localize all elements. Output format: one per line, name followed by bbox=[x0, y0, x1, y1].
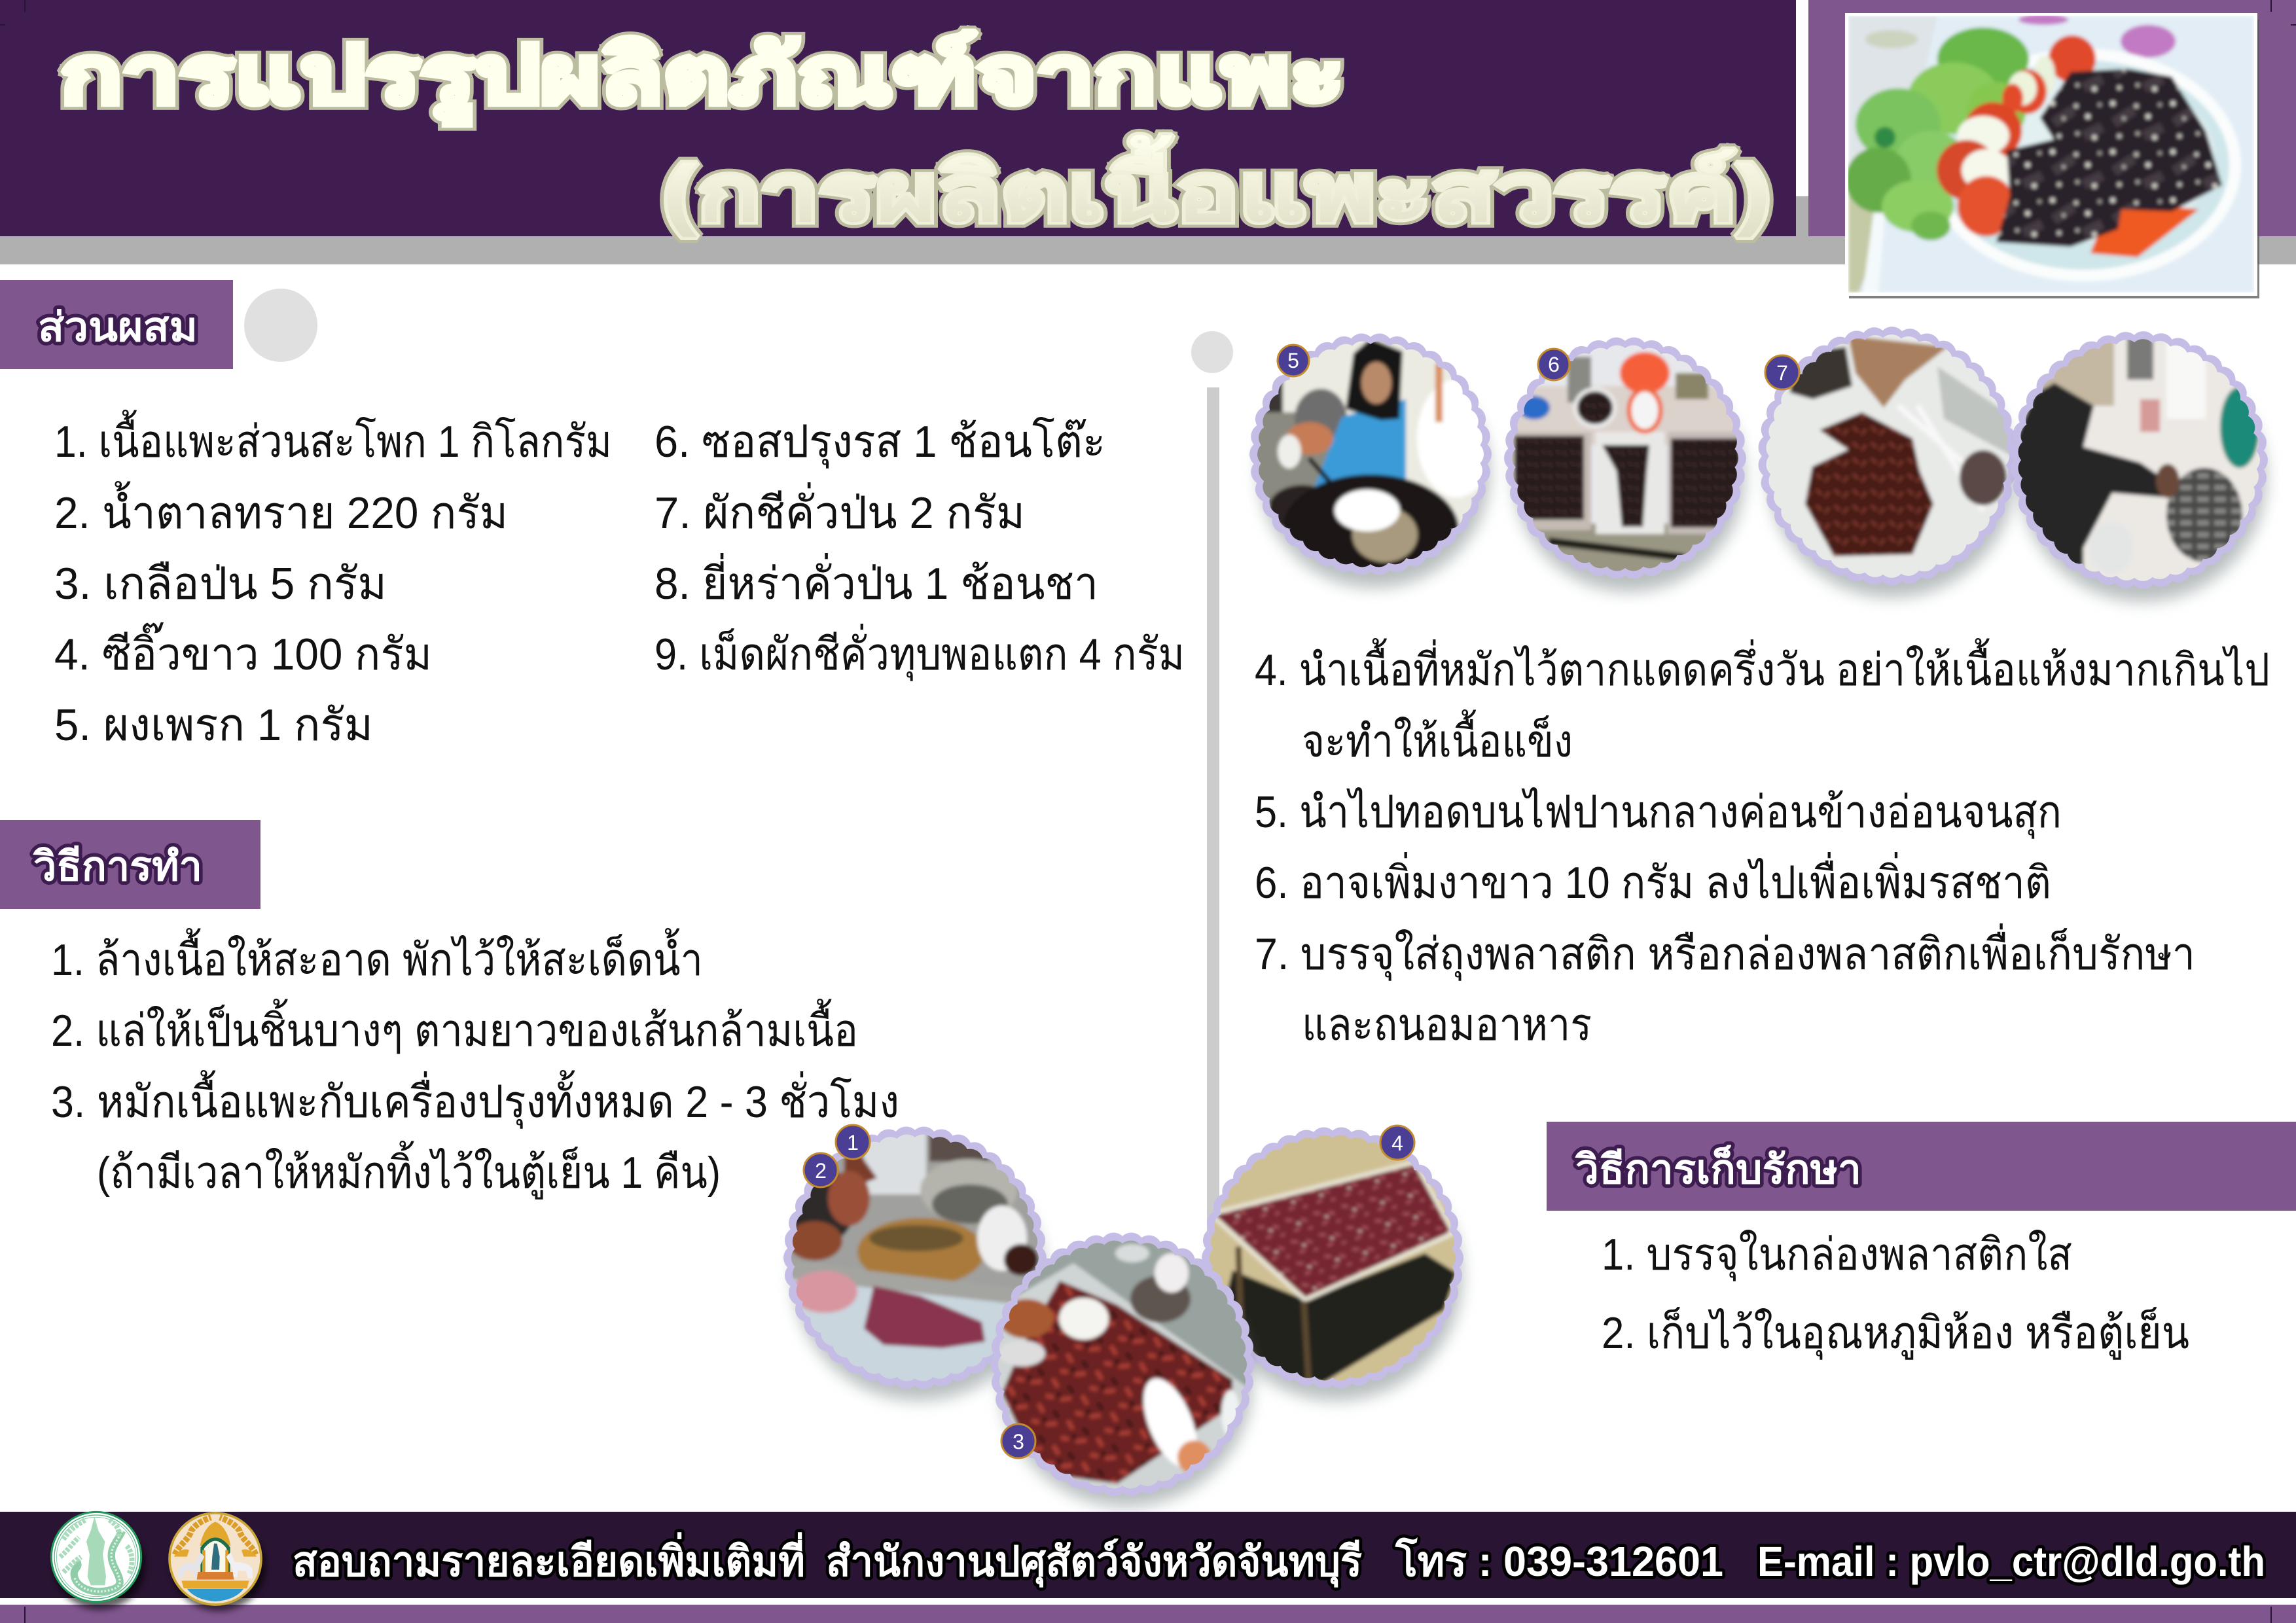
ingredients list: 4. ซีอิ๊วขาว 100 กรัม bbox=[54, 622, 432, 679]
footer contact text: E-mail : pvlo_ctr@dld.go.th bbox=[1757, 1538, 2265, 1585]
method steps 1-3: 3. หมักเนื้อแพะกับเครื่องปรุงทั้งหมด 2 - 3 ชั่วโมง bbox=[51, 1070, 899, 1129]
method steps 4-7 bbox=[1255, 638, 2270, 1050]
method steps 4-7: 7. บรรจุใส่ถุงพลาสติก หรือกล่องพลาสติกเพื่อเก็บรักษา bbox=[1255, 923, 2195, 981]
photo 3: seasoning meat bbox=[988, 1230, 1263, 1507]
ingredients list: 2. น้ำตาลทราย 220 กรัม bbox=[54, 481, 508, 538]
footer band bbox=[0, 1512, 2296, 1623]
badge 5: 5 bbox=[1287, 349, 1299, 372]
logo: Chanthaburi province seal bbox=[170, 1513, 266, 1611]
ingredients list: 3. เกลือป่น 5 กรัม bbox=[54, 559, 387, 609]
photo 8: packing bbox=[2009, 327, 2271, 601]
badge 5 bbox=[1278, 345, 1309, 376]
header band bbox=[0, 0, 2296, 264]
footer contact text: สอบถามรายละเอียดเพิ่มเติมที่ bbox=[293, 1532, 805, 1585]
badge 7: 7 bbox=[1776, 361, 1788, 385]
footer contact text: โทร : 039-312601 bbox=[1395, 1537, 1723, 1585]
storage list: 2. เก็บไว้ในอุณหภูมิห้อง หรือตู้เย็น bbox=[1602, 1307, 2189, 1360]
method steps 4-7: 6. อาจเพิ่มงาขาว 10 กรัม ลงไปเพื่อเพิ่มรสชาติ bbox=[1255, 852, 2051, 908]
ingredients list bbox=[54, 410, 1185, 750]
title line 1: การแปรรูปผลิตภัณฑ์จากแพะ bbox=[60, 31, 1344, 125]
photo 5: frying bbox=[1244, 327, 1499, 588]
badge 2: 2 bbox=[815, 1159, 827, 1183]
method steps 4-7: และถนอมอาหาร bbox=[1302, 1000, 1592, 1050]
section heading: ingredients bbox=[0, 280, 233, 369]
footer contact text bbox=[293, 1532, 2265, 1588]
method steps 1-3: (ถ้ามีเวลาให้หมักทิ้งไว้ในตู้เย็น 1 คืน) bbox=[97, 1141, 721, 1200]
ingredients list: 6. ซอสปรุงรส 1 ช้อนโต๊ะ bbox=[655, 416, 1105, 469]
badge 3: 3 bbox=[1013, 1430, 1024, 1454]
logo: Department of Livestock seal bbox=[51, 1512, 145, 1610]
footer contact text: สำนักงานปศุสัตว์จังหวัดจันทบุรี bbox=[826, 1538, 1362, 1588]
photo 1: cutting meat bbox=[774, 1122, 1054, 1400]
method steps 4-7: 5. นำไปทอดบนไฟปานกลางค่อนข้างอ่อนจนสุก bbox=[1255, 787, 2062, 839]
method steps 4-7: จะทำให้เนื้อแข็ง bbox=[1302, 709, 1573, 766]
method steps 1-3: 1. ล้างเนื้อให้สะอาด พักไว้ให้สะเด็ดน้ำ bbox=[51, 928, 703, 985]
title line 2: (การผลิตเนื้อแพะสวรรค์) bbox=[662, 135, 1771, 238]
method steps 1-3: 2. แล่ให้เป็นชิ้นบางๆ ตามยาวของเส้นกล้ามเนื้อ bbox=[51, 999, 858, 1056]
ingredients list: 9. เม็ดผักชีคั่วทุบพอแตก 4 กรัม bbox=[655, 624, 1185, 681]
badge 4 bbox=[1380, 1126, 1414, 1160]
section heading: storage: วิธีการเก็บรักษา bbox=[1575, 1145, 1861, 1192]
vertical divider bbox=[1191, 331, 1233, 1238]
storage list: 1. บรรจุในกล่องพลาสติกใส bbox=[1602, 1229, 2072, 1281]
badge 1 bbox=[836, 1125, 870, 1159]
badge 6: 6 bbox=[1548, 353, 1560, 376]
photo 4: drying rack bbox=[1198, 1122, 1473, 1400]
method steps 1-3 bbox=[51, 928, 899, 1200]
ingredients list: 1. เนื้อแพะส่วนสะโพก 1 กิโลกรัม bbox=[54, 410, 612, 467]
photo 7: bagging bbox=[1757, 324, 2019, 597]
title line 2: (การผลิตเนื้อแพะสวรรค์) bbox=[662, 135, 1771, 238]
title line 2 bbox=[662, 135, 1771, 238]
ingredients list: 8. ยี่หร่าคั่วป่น 1 ช้อนชา bbox=[655, 553, 1098, 609]
section heading: storage bbox=[1547, 1122, 2296, 1211]
storage list bbox=[1602, 1229, 2189, 1360]
badge 3 bbox=[1001, 1424, 1035, 1458]
badge 1: 1 bbox=[847, 1131, 859, 1154]
ingredients list: 5. ผงเพรก 1 กรัม bbox=[54, 700, 373, 750]
photo 6: weighing bbox=[1502, 334, 1751, 592]
section heading: ingredients: ส่วนผสม bbox=[38, 305, 198, 350]
badge 2 bbox=[804, 1153, 838, 1187]
section heading: method bbox=[0, 820, 260, 909]
title line 1: การแปรรูปผลิตภัณฑ์จากแพะ bbox=[60, 31, 1344, 125]
title bbox=[60, 31, 1771, 238]
section heading: method: วิธีการทำ bbox=[33, 844, 202, 889]
grey dot bbox=[244, 289, 317, 362]
ingredients list: 7. ผักชีคั่วป่น 2 กรัม bbox=[655, 482, 1025, 538]
badge 4: 4 bbox=[1391, 1132, 1403, 1155]
badge 6 bbox=[1538, 349, 1570, 380]
badge 7 bbox=[1765, 355, 1799, 389]
photo: finished goat meat dish bbox=[1845, 13, 2259, 298]
